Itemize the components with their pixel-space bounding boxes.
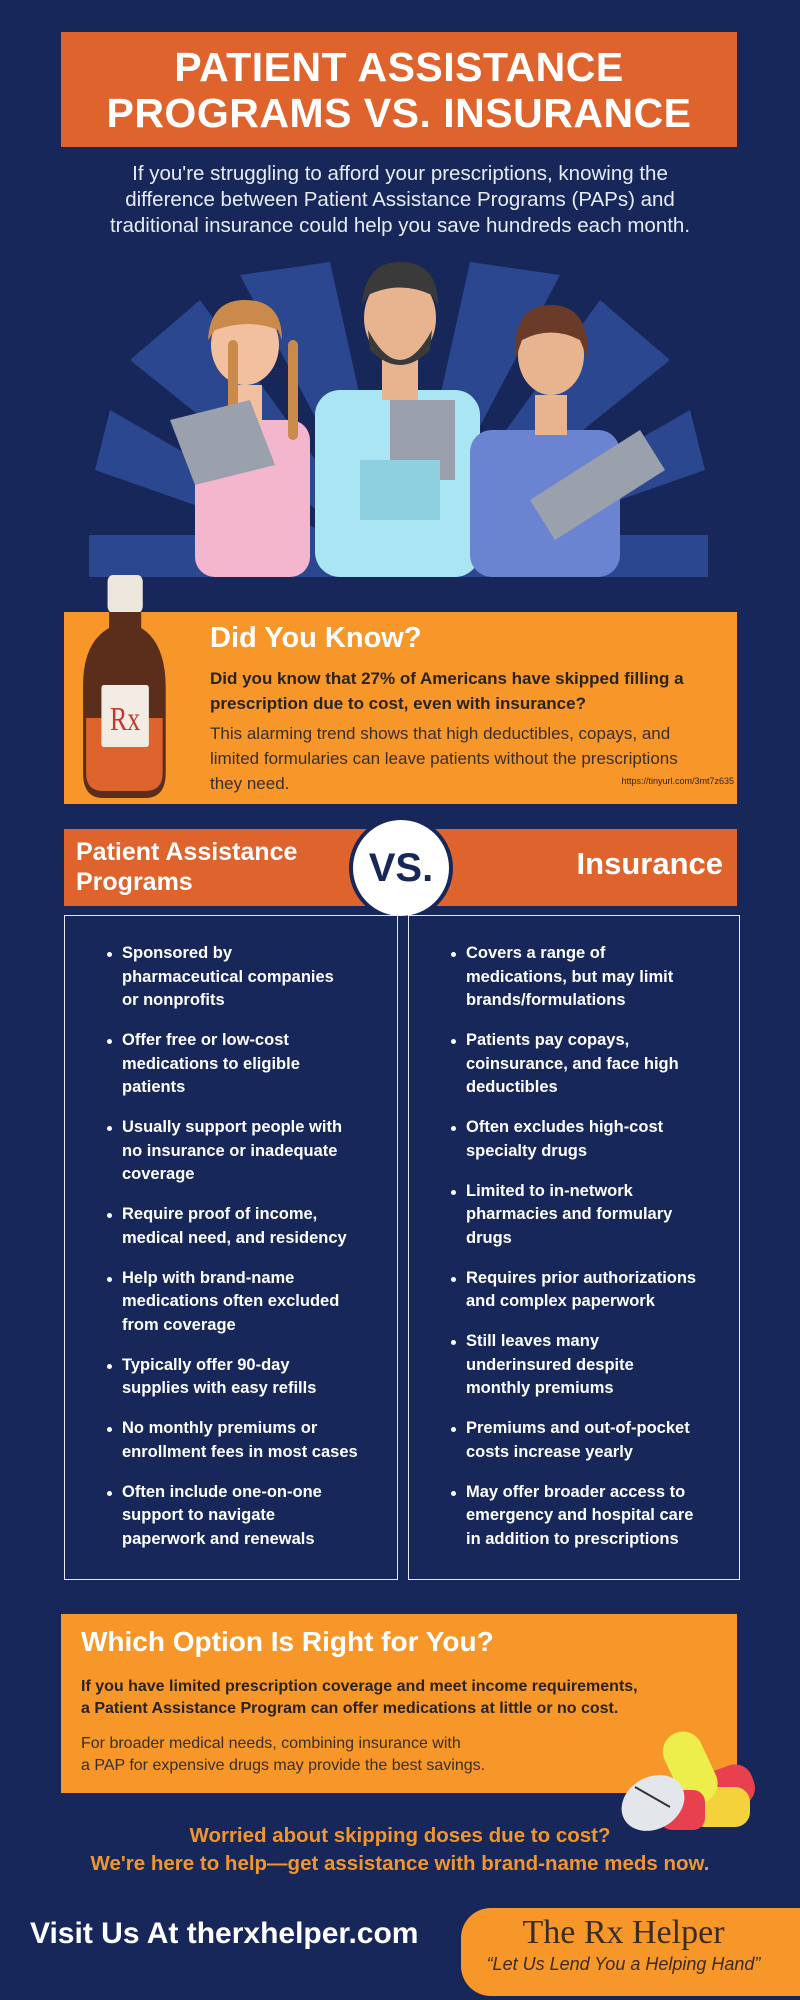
panel: insurance column: Covers a range of [466, 944, 605, 962]
logo: the rx helper: The Rx Helper [522, 1914, 725, 1951]
panel: PAP column: no insurance or inadequate [122, 1142, 337, 1160]
title: PROGRAMS VS. INSURANCE [106, 90, 692, 136]
panel: insurance column: brands/formulations [466, 991, 626, 1009]
call to action text [90, 1824, 709, 1875]
bold advice: a Patient Assistance Program can offer medications at little or no cost. [81, 1700, 618, 1717]
panel: insurance column: costs increase yearly [466, 1443, 633, 1461]
logo: the rx helper [461, 1908, 800, 1996]
panel: insurance column: Premiums and out-of-pocket [466, 1419, 690, 1437]
panel: did you know [64, 612, 737, 804]
panel: insurance column: Patients pay copays, [466, 1031, 629, 1049]
left heading [76, 838, 297, 896]
panel: insurance column: underinsured despite [466, 1356, 634, 1374]
panel: PAP column: from coverage [122, 1316, 236, 1334]
panel: PAP column: supplies with easy refills [122, 1379, 316, 1397]
icon: rx bottle [83, 575, 166, 798]
regular advice: a PAP for expensive drugs may provide the best savings. [81, 1757, 485, 1774]
regular advice [81, 1735, 485, 1774]
panel: PAP column [64, 915, 398, 1580]
panel: PAP column: patients [122, 1078, 185, 1096]
illustration: healthcare workers [89, 262, 708, 577]
subtitle: If you're struggling to afford your prescriptions, knowing the [132, 162, 668, 185]
center man [315, 262, 480, 577]
panel: PAP column: paperwork and renewals [122, 1530, 315, 1548]
heading: Did You Know? [210, 622, 422, 654]
website link text: Visit Us At therxhelper.com [30, 1917, 418, 1950]
bold stat [210, 669, 684, 713]
panel: PAP column: support to navigate [122, 1506, 275, 1524]
panel: insurance column: Often excludes high-cost [466, 1118, 663, 1136]
panel: PAP column: enrollment fees in most cases [122, 1443, 358, 1461]
panel: insurance column: in addition to prescriptions [466, 1530, 679, 1548]
panel: PAP column: Typically offer 90-day [122, 1356, 290, 1374]
panel: insurance column: specialty drugs [466, 1142, 587, 1160]
panel: insurance column: Still leaves many [466, 1332, 599, 1350]
left heading: Patient Assistance [76, 838, 297, 866]
panel: PAP column: medications often excluded [122, 1292, 339, 1310]
right heading: Insurance [577, 846, 723, 881]
source url: https://tinyurl.com/3mt7z635 [621, 776, 734, 786]
panel: PAP column: Help with brand-name [122, 1269, 294, 1287]
panel: insurance column: coinsurance, and face high [466, 1055, 679, 1073]
bold stat: Did you know that 27% of Americans have skipped filling a [210, 669, 684, 688]
panel: insurance column: medications, but may limit [466, 968, 673, 986]
panel: insurance column: May offer broader access to [466, 1483, 685, 1501]
panel: PAP column: Usually support people with [122, 1118, 342, 1136]
panel: PAP column: coverage [122, 1165, 194, 1183]
panel: insurance column: Limited to in-network [466, 1182, 633, 1200]
vs header bar [64, 829, 737, 906]
panel: insurance column [408, 915, 740, 1580]
panel: insurance column: Requires prior authorizations [466, 1269, 696, 1287]
panel: PAP column: pharmaceutical companies [122, 968, 334, 986]
subtitle [110, 162, 690, 237]
logo: the rx helper: “Let Us Lend You a Helping Hand” [487, 1954, 760, 1974]
panel: PAP column: medications to eligible [122, 1055, 300, 1073]
panel: PAP column: Require proof of income, [122, 1205, 317, 1223]
icon: pills [622, 1732, 755, 1831]
vs badge [349, 816, 453, 920]
panel: insurance column: and complex paperwork [466, 1292, 655, 1310]
panel: insurance column: monthly premiums [466, 1379, 614, 1397]
explanation [210, 724, 678, 793]
title: PATIENT ASSISTANCE [174, 44, 624, 90]
title [61, 32, 737, 147]
panel: PAP column: Offer free or low-cost [122, 1031, 289, 1049]
panel: insurance column: drugs [466, 1229, 512, 1247]
right woman [470, 305, 665, 577]
call to action text: Worried about skipping doses due to cost? [189, 1824, 611, 1847]
explanation: limited formularies can leave patients without the prescriptions [210, 749, 678, 768]
panel: PAP column: No monthly premiums or [122, 1419, 317, 1437]
vs badge: VS. [369, 846, 433, 890]
left heading: Programs [76, 868, 193, 896]
left woman [170, 300, 310, 577]
explanation: This alarming trend shows that high deductibles, copays, and [210, 724, 670, 743]
panel: insurance column: emergency and hospital care [466, 1506, 693, 1524]
bold advice [81, 1678, 638, 1717]
call to action text: We're here to help—get assistance with brand-name meds now. [91, 1852, 709, 1875]
subtitle: traditional insurance could help you save hundreds each month. [110, 214, 690, 237]
panel: insurance column: deductibles [466, 1078, 558, 1096]
heading: Which Option Is Right for You? [81, 1626, 494, 1657]
regular advice: For broader medical needs, combining insurance with [81, 1735, 461, 1752]
subtitle: difference between Patient Assistance Programs (PAPs) and [125, 188, 675, 211]
panel: PAP column: Sponsored by [122, 944, 232, 962]
icon: rx bottle: Rx [110, 700, 140, 738]
panel: PAP column: or nonprofits [122, 991, 225, 1009]
explanation: they need. [210, 774, 289, 793]
panel: insurance column: pharmacies and formulary [466, 1205, 672, 1223]
panel: PAP column: Often include one-on-one [122, 1483, 322, 1501]
panel: PAP column: medical need, and residency [122, 1229, 347, 1247]
panel: which option [61, 1614, 737, 1793]
bold stat: prescription due to cost, even with insurance? [210, 694, 586, 713]
bold advice: If you have limited prescription coverage and meet income requirements, [81, 1678, 638, 1695]
